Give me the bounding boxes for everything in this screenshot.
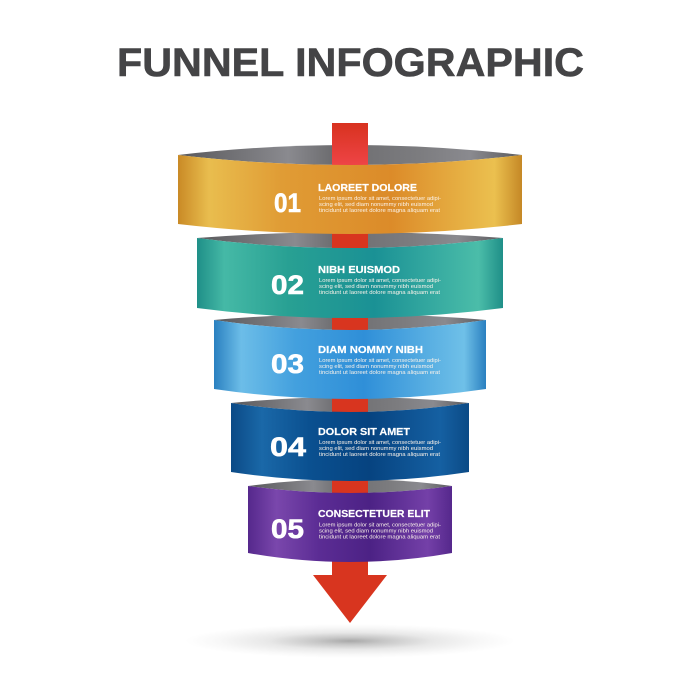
body text 04 [319,440,441,458]
body text 05: scing elit, sed diam nonummy nibh euismod [319,528,433,534]
heading 04: DOLOR SIT AMET [318,426,411,438]
number 02: 02 [271,270,304,300]
body text 01: scing elit, sed diam nonummy nibh euismod [319,202,433,208]
band 03 [214,320,486,399]
body text 03: tincidunt ut laoreet dolore magna aliquam erat [319,370,440,376]
body text 03: scing elit, sed diam nonummy nibh euismod [319,364,433,370]
body text 03 [319,358,441,376]
red arrow through funnel [313,123,387,623]
heading 02: NIBH EUISMOD [318,264,400,276]
title: FUNNEL INFOGRAPHIC [117,41,584,85]
band 05 [248,486,452,562]
body text 01 [319,196,441,214]
number 01: 01 [274,188,301,218]
body text 02: Lorem ipsum dolor sit amet, consectetuer adipi- [319,278,441,284]
body text 02: tincidunt ut laoreet dolore magna aliquam erat [319,290,440,296]
body text 02 [319,278,441,296]
number 05: 05 [271,514,304,544]
number 04: 04 [270,432,306,462]
body text 04: Lorem ipsum dolor sit amet, consectetuer adipi- [319,440,441,446]
band 02 [197,238,503,318]
ground shadow [185,624,515,658]
number 03: 03 [271,349,304,379]
body text 05: tincidunt ut laoreet dolore magna aliquam erat [319,534,440,540]
body text 01: tincidunt ut laoreet dolore magna aliquam erat [319,208,440,214]
heading 03: DIAM NOMMY NIBH [318,344,423,356]
funnel inner back walls [178,145,522,493]
body text 05 [319,522,441,540]
body text 05: Lorem ipsum dolor sit amet, consectetuer adipi- [319,522,441,528]
heading 05: CONSECTETUER ELIT [318,508,431,520]
heading 01: LAOREET DOLORE [318,182,417,194]
body text 04: tincidunt ut laoreet dolore magna aliquam erat [319,452,440,458]
body text 03: Lorem ipsum dolor sit amet, consectetuer adipi- [319,358,441,364]
band 04 [231,403,469,481]
band 01 [178,155,522,234]
body text 02: scing elit, sed diam nonummy nibh euismod [319,284,433,290]
body text 04: scing elit, sed diam nonummy nibh euismod [319,446,433,452]
body text 01: Lorem ipsum dolor sit amet, consectetuer adipi- [319,196,441,202]
